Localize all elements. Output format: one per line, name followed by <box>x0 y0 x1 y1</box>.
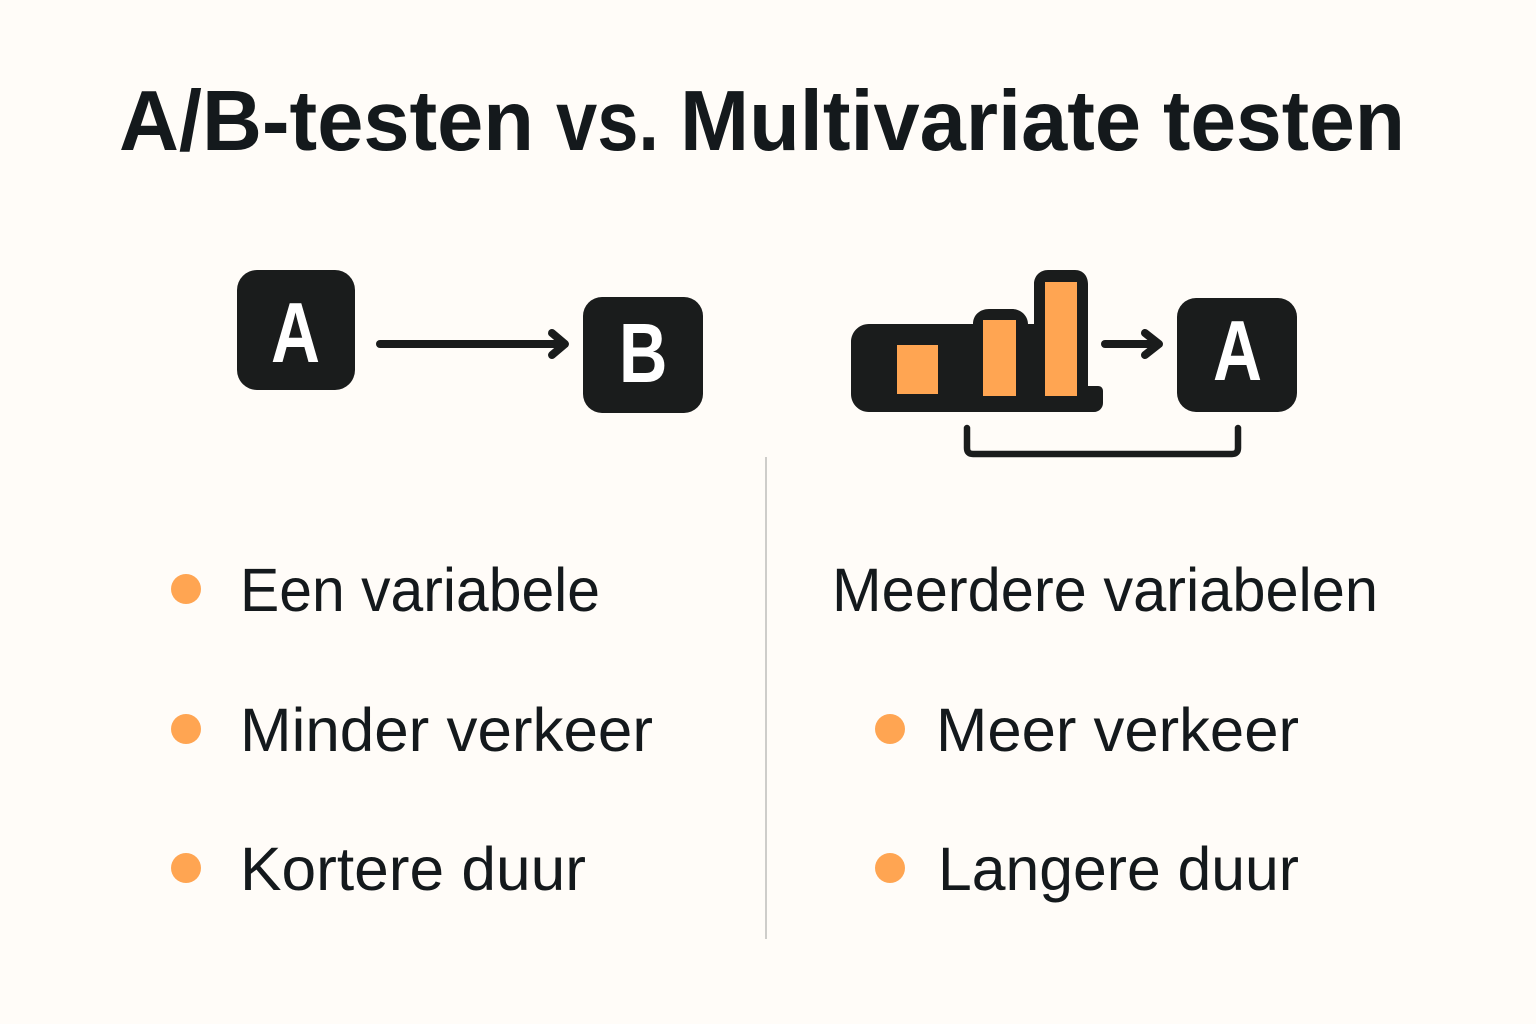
icon: box B: B <box>619 307 667 401</box>
icon: box A <box>237 270 355 390</box>
arrow: A to B <box>380 333 565 355</box>
title: vs. <box>556 74 659 169</box>
icon: box A <box>1177 298 1297 412</box>
icon: box A: A <box>271 284 320 381</box>
title: Multivariate <box>680 74 1141 169</box>
title: A/B-testen <box>119 74 534 169</box>
bullet <box>171 574 201 604</box>
bullet <box>875 714 905 744</box>
text: meerdere variabelen: Meerdere variabelen <box>832 556 1378 624</box>
bar: short <box>897 345 938 394</box>
icon: box A: A <box>1213 302 1262 399</box>
text: langere duur: Langere duur <box>938 835 1299 903</box>
arrow: bars to A <box>1105 333 1159 355</box>
bullet <box>171 853 201 883</box>
title: testen <box>1163 74 1405 169</box>
diagram: multivariate test <box>851 270 1297 454</box>
bullet <box>875 853 905 883</box>
bar: medium <box>983 320 1016 396</box>
icon: box B <box>583 297 703 413</box>
diagram: A/B test <box>237 270 703 413</box>
icon: bar chart block <box>851 270 1103 412</box>
bullet <box>171 714 201 744</box>
title <box>119 74 1405 169</box>
text: een variabele: Een variabele <box>240 556 600 624</box>
bracket <box>967 428 1238 454</box>
list: A/B properties <box>171 556 653 903</box>
text: kortere duur: Kortere duur <box>240 835 586 903</box>
text: meer verkeer: Meer verkeer <box>936 696 1299 764</box>
list: multivariate properties <box>832 556 1378 903</box>
bar: tall <box>1045 282 1077 396</box>
text: minder verkeer: Minder verkeer <box>240 696 653 764</box>
